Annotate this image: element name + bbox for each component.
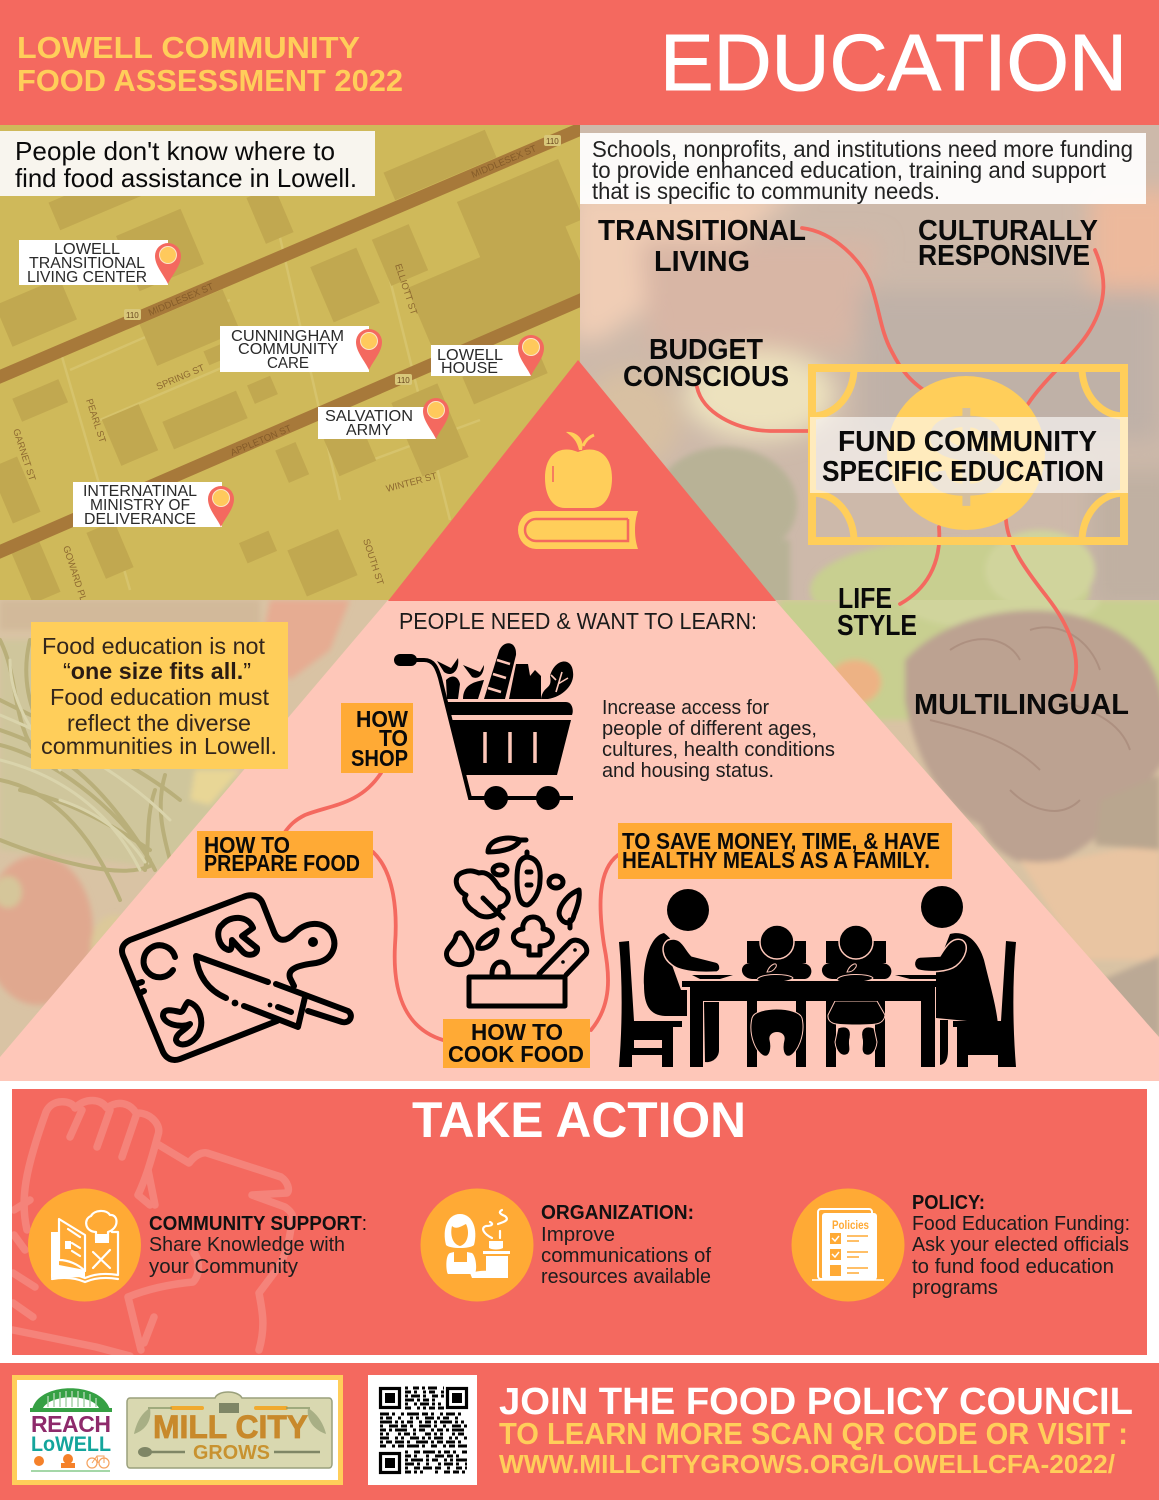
roads [0, 125, 590, 556]
action: policy: POLICY: [912, 1192, 985, 1214]
child right [826, 941, 886, 963]
logo: Mill City Grows [127, 1392, 332, 1468]
action: community support: your Community [149, 1256, 298, 1278]
hands watermark [13, 1100, 293, 1356]
label: how to shop: SHOP [351, 745, 408, 771]
right adult [936, 933, 998, 1024]
action: policy: to fund food education [912, 1256, 1114, 1278]
panel: funding statement: to provide enhanced education, training and support [592, 157, 1107, 183]
header banner [0, 0, 1159, 125]
label: transitional living: LIVING [654, 246, 750, 278]
text: increase access: Increase access for [602, 697, 769, 719]
child left [747, 941, 806, 963]
action: community support: COMMUNITY SUPPORT: [149, 1213, 367, 1235]
label: lifestyle [837, 583, 917, 642]
label: how to shop: HOW [356, 706, 408, 732]
label: save money time healthy meals [618, 823, 952, 879]
route badges: 110 [397, 376, 410, 385]
label: lifestyle: STYLE [837, 610, 917, 642]
map label: International Ministry of Deliverance: DELIVERANCE [84, 511, 196, 528]
icon: shopping cart [400, 643, 573, 810]
connectors between learning topics [285, 773, 618, 1040]
map label: Lowell House: LOWELL [437, 347, 503, 364]
road labels: SPRING ST [155, 363, 206, 393]
icon: woman cooking [445, 1210, 510, 1278]
left chair [619, 941, 682, 1067]
callout: fund community specific education [810, 417, 1128, 493]
callout: where to find food: find food assistance in Lowell. [15, 163, 357, 193]
map label: Cunningham Community Care: CARE [267, 355, 309, 372]
callout: one size fits all: reflect the diverse [67, 710, 251, 736]
logo: Reach Lowell: REACH [31, 1411, 111, 1437]
panel: partner logos [14, 1378, 340, 1482]
map label: Lowell House [431, 335, 544, 377]
road labels: MIDDLESEX ST [470, 143, 538, 181]
road labels: ELLIOTT ST [392, 263, 419, 317]
connector lines to funding box [697, 228, 1103, 690]
action: organization: resources available [541, 1266, 711, 1288]
table [682, 981, 942, 1067]
map label: Salvation Army [318, 398, 449, 439]
callout: fund community specific education: FUND COMMUNITY [838, 426, 1097, 458]
panel: funding photo background [570, 125, 1159, 640]
label: save money time healthy meals: HEALTHY MEALS AS A FAMILY. [622, 847, 930, 873]
text: join the food policy council: JOIN THE FOOD POLICY COUNCIL [499, 1381, 1133, 1423]
label: how to prepare food: HOW TO [204, 832, 290, 858]
map label: Cunningham Community Care [220, 326, 382, 372]
panel: map of food assistance [0, 125, 593, 603]
assessment title: FOOD ASSESSMENT 2022 [17, 63, 403, 98]
action: organization [420, 1188, 711, 1302]
action: community support: Share Knowledge with [149, 1234, 345, 1256]
lettuce top [809, 528, 1097, 600]
panel: funding statement [580, 133, 1146, 204]
green beans [0, 640, 180, 900]
label: budget conscious: CONSCIOUS [623, 361, 789, 393]
label: culturally responsive: RESPONSIVE [918, 240, 1090, 272]
panel: take action [12, 1089, 1147, 1356]
QR code [368, 1375, 477, 1485]
route badges: 110 [126, 311, 139, 320]
text: increase access: people of different ages, [602, 718, 817, 740]
label: culturally responsive: CULTURALLY [918, 215, 1098, 247]
road labels: GOWARD PL [60, 545, 88, 603]
footer banner [0, 1363, 1159, 1500]
heading: education: EDUCATION [660, 18, 1127, 107]
label: how to prepare food: PREPARE FOOD [204, 850, 360, 876]
icon: apple on a book [518, 432, 638, 549]
callout: one size fits all: Food education must [50, 684, 270, 710]
panel: lower photo background [0, 600, 1159, 1057]
label: how to cook food: HOW TO [471, 1019, 563, 1045]
action: policy: Ask your elected officials [912, 1234, 1129, 1256]
map label: International Ministry of Deliverance [73, 482, 234, 528]
road labels: GARNET ST [10, 428, 37, 483]
adults heads [667, 889, 709, 931]
label: multilingual: MULTILINGUAL [914, 689, 1129, 721]
map label: Lowell Transitional Living Center [19, 240, 181, 286]
panel: funding statement: Schools, nonprofits, and institutions need more funding [592, 136, 1133, 162]
label: how to prepare food [197, 831, 373, 878]
logo: Reach Lowell [30, 1388, 112, 1471]
action: community support [28, 1188, 367, 1302]
label: budget conscious [623, 334, 789, 393]
road labels: APPLETON ST [229, 423, 293, 459]
left adult [644, 933, 687, 1016]
action: organization: communications of [541, 1245, 711, 1267]
label: transitional living [598, 215, 806, 278]
road labels: SOUTH ST [360, 538, 386, 587]
map label: Lowell House: HOUSE [441, 360, 498, 377]
label: transitional living: TRANSITIONAL [598, 215, 806, 247]
logo: Mill City Grows: GROWS [193, 1442, 270, 1464]
callout: one size fits all: communities in Lowell. [41, 733, 277, 759]
vegetables, left [0, 600, 350, 1005]
label: how to shop: TO [379, 725, 408, 751]
pyramid: lower section [0, 600, 1159, 1081]
action: organization: ORGANIZATION: [541, 1202, 694, 1224]
action: policy: programs [912, 1277, 998, 1299]
route badges: 110 [546, 137, 559, 146]
panel: funding statement: that is specific to community needs. [592, 178, 940, 204]
road labels: MIDDLESEX ST [147, 281, 215, 319]
label: budget conscious: BUDGET [649, 334, 763, 366]
assessment title [17, 30, 403, 98]
text: increase access: cultures, health conditions [602, 739, 835, 761]
callout: fund community specific education: SPECIFIC EDUCATION [822, 456, 1104, 488]
groceries [437, 643, 573, 699]
road labels: WINTER ST [385, 471, 438, 495]
label: culturally responsive [918, 215, 1098, 272]
icon: policy checklist [812, 1209, 884, 1280]
action: policy [792, 1188, 1130, 1302]
icon: family at table [619, 886, 1016, 1067]
route badges [124, 135, 561, 385]
text: increase access: and housing status. [602, 760, 774, 782]
icon: dollar bill [812, 368, 1124, 541]
callout: one size fits all [31, 622, 288, 769]
callout: where to find food [0, 131, 375, 196]
vegetables, right [780, 570, 1159, 1040]
icon: recipe book [51, 1211, 118, 1282]
callout: one size fits all: “one size fits all.” [63, 658, 251, 684]
assessment title: LOWELL COMMUNITY [17, 30, 360, 65]
map label: Cunningham Community Care: CUNNINGHAM [231, 328, 344, 345]
label: how to cook food: COOK FOOD [448, 1041, 584, 1067]
label: save money time healthy meals: TO SAVE MONEY, TIME, & HAVE [622, 828, 940, 854]
label: lifestyle: LIFE [838, 583, 892, 615]
callout: where to find food: People don't know where to [15, 136, 335, 166]
icon: policy checklist: Policies [832, 1220, 869, 1232]
map label: International Ministry of Deliverance: INTERNATINAL [83, 483, 197, 500]
broccoli [668, 446, 798, 600]
text: learn more: TO LEARN MORE SCAN QR CODE OR VISIT : [499, 1416, 1128, 1451]
label: how to shop [341, 703, 413, 773]
map label: Salvation Army: SALVATION [325, 408, 413, 425]
road labels: PEARL ST [83, 398, 108, 444]
map label: Salvation Army: ARMY [346, 422, 392, 439]
icon: dollar bill: $ [925, 389, 1007, 523]
label: how to cook food [443, 1019, 590, 1068]
map label: Lowell Transitional Living Center: TRANSITIONAL [29, 255, 145, 272]
map label: Lowell Transitional Living Center: LOWELL [54, 241, 120, 258]
map label: Cunningham Community Care: COMMUNITY [238, 341, 338, 358]
pyramid: top triangle with apple and book [388, 360, 776, 601]
action: organization: Improve [541, 1224, 615, 1246]
map label: International Ministry of Deliverance: MINISTRY OF [90, 497, 190, 514]
icon: ingredients falling into pot [446, 838, 587, 1006]
text: website: WWW.MILLCITYGROWS.ORG/LOWELLCFA-2022/ [499, 1449, 1115, 1479]
callout: one size fits all: Food education is not [42, 633, 266, 659]
action: policy: Food Education Funding: [912, 1213, 1130, 1235]
logo: Mill City Grows: MILL CITY [153, 1409, 308, 1445]
text: increase access [602, 697, 835, 782]
road labels [10, 143, 538, 603]
map label: Lowell Transitional Living Center: LIVING CENTER [27, 269, 147, 286]
icon: cutting board and knife [122, 895, 351, 1060]
right chair [953, 941, 1016, 1067]
heading: take action: TAKE ACTION [412, 1092, 746, 1148]
logo: Reach Lowell: LoWELL [31, 1433, 111, 1456]
heading: people need and want to learn: PEOPLE NEED & WANT TO LEARN: [399, 608, 757, 634]
